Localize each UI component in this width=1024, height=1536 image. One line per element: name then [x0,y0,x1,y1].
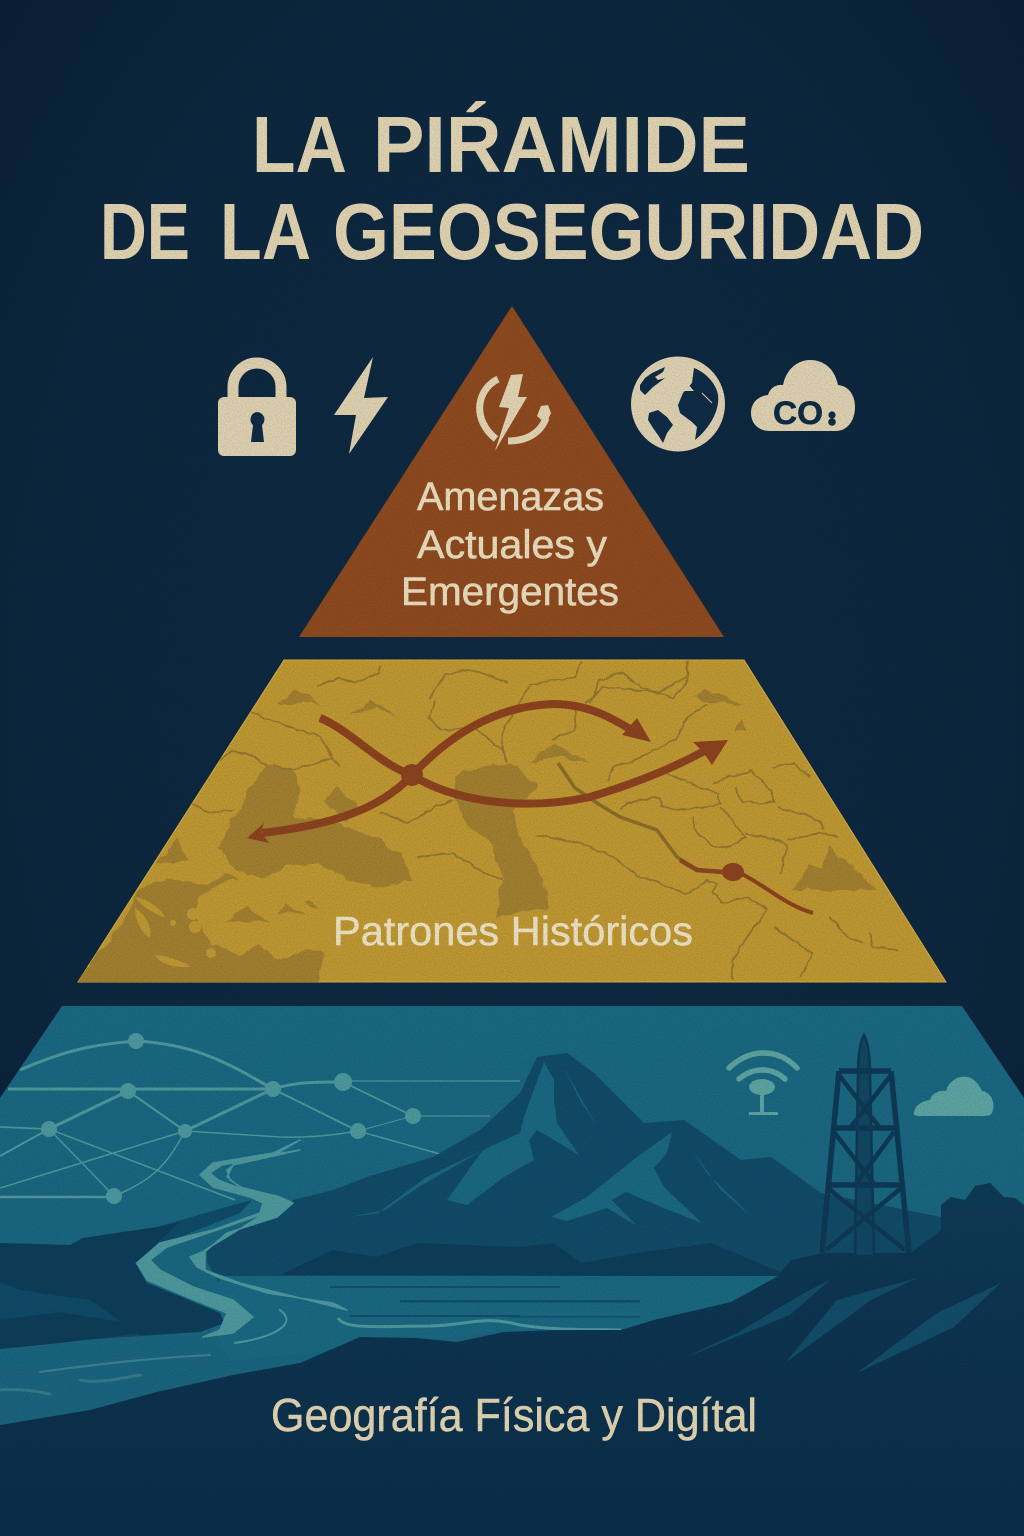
river [0,1140,347,1394]
foreground land [0,1183,1024,1536]
icon: oil tower [822,1035,909,1256]
panel: base tier, physical and digital geography [0,1006,1024,1536]
icon: CO2 cloud [751,360,855,431]
icon: CO2 cloud: CO [773,395,823,431]
mountains [207,1053,941,1290]
arrow: southern route with node [722,863,813,913]
icon: globe [631,356,725,452]
title: LA [220,187,311,276]
panel: middle tier, historical patterns [70,660,946,985]
text: threats label: Actuales y [417,523,607,567]
text: threats label: Amenazas [417,475,604,519]
title: GEOSEGURIDAD [333,187,924,276]
left river bank [0,1200,252,1349]
text: patterns label: Patrones Históricos [333,908,693,954]
title [100,100,924,276]
arrow: eastward historical route [320,718,728,804]
arrow: arcing historical route [247,704,651,843]
network graph [0,1041,520,1200]
icon: wifi antenna [729,1053,797,1115]
map: regions and borders [70,660,897,985]
text: threats label [401,475,619,614]
lake [218,1276,778,1330]
icon: lightning bolt [334,357,388,454]
icon: cloud [914,1077,994,1116]
icon: bolt with cycle arrows [480,374,551,451]
panel: top tier, threats [299,306,724,637]
text: threats label: Emergentes [401,570,619,614]
title: PIŔAMIDE [373,100,750,189]
title: DE [100,187,190,276]
icon: padlock [218,363,296,456]
text: base label: Geografía Física y Digítal [271,1389,757,1441]
title: LA [252,100,347,189]
